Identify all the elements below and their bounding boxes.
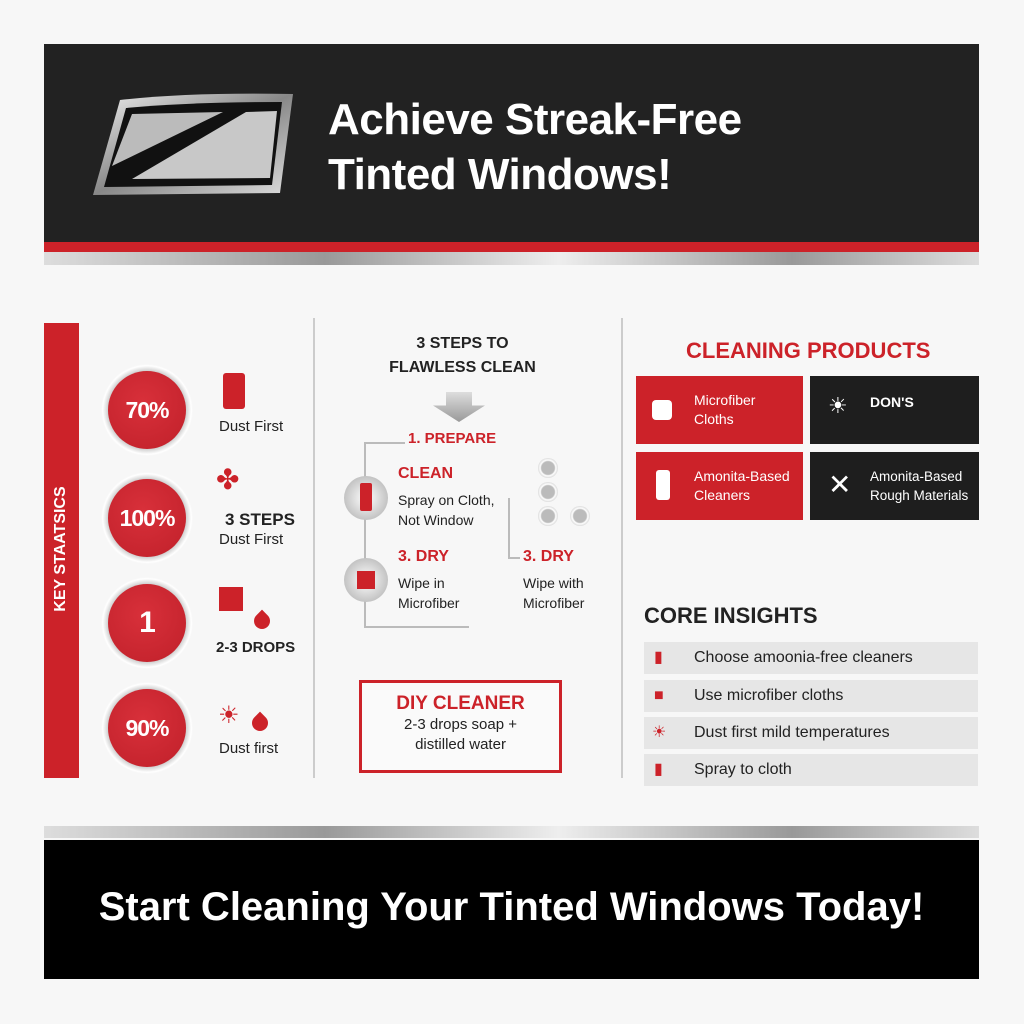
header banner — [44, 44, 979, 265]
panel: 3 steps: Not Window — [398, 512, 473, 528]
stat 1: 1 — [139, 606, 155, 639]
panel: cleaning products: DON'S — [870, 394, 914, 410]
panel: core insights: Spray to cloth — [694, 761, 792, 778]
panel: key statistics: Dust First — [219, 531, 283, 548]
panel: key statistics: 2-3 DROPS — [216, 639, 295, 656]
panel: cleaning products: Amonita-Based — [694, 468, 790, 484]
stat 70% — [101, 364, 193, 456]
panel: cleaning products: Amonita-Based — [870, 469, 962, 484]
panel: core insights: Use microfiber cloths — [694, 687, 843, 704]
panel: 3 steps: CLEAN — [398, 465, 453, 482]
panel: cleaning products — [636, 338, 979, 520]
panel: key statistics: ☀ — [218, 702, 240, 729]
panel: key statistics: KEY STAATSICS — [52, 486, 69, 612]
DIY cleaner box — [359, 680, 562, 773]
panel: 3 steps: Microfiber — [523, 595, 584, 611]
heading — [389, 335, 536, 376]
arrow down — [433, 392, 485, 422]
panel: cleaning products: CLEANING PRODUCTS — [686, 338, 930, 363]
panel: cleaning products: ☀ — [828, 393, 848, 418]
panel: 3 steps: 1. PREPARE — [408, 430, 496, 447]
panel: 3 steps — [344, 335, 590, 773]
panel: 3 steps: 3. DRY — [523, 548, 574, 565]
panel: 3 steps: 3. DRY — [398, 548, 449, 565]
title — [328, 95, 742, 199]
panel: cleaning products: Microfiber — [694, 392, 755, 408]
stat 90%: 90% — [125, 714, 169, 740]
panel: core insights: ▮ — [654, 649, 663, 666]
panel: cleaning products: Cloths — [694, 411, 734, 427]
DIY cleaner box: 2-3 drops soap + — [404, 716, 517, 733]
panel: cleaning products: Rough Materials — [870, 488, 968, 503]
panel: key statistics — [44, 318, 315, 778]
heading: 3 STEPS TO — [416, 335, 509, 352]
stat 100%: 100% — [120, 504, 174, 530]
step clean — [344, 476, 388, 520]
heading: FLAWLESS CLEAN — [389, 359, 536, 376]
panel: core insights: Choose amoonia-free cleaners — [694, 649, 913, 666]
DIY cleaner box: DIY CLEANER — [396, 693, 525, 714]
panel: key statistics: Dust first — [219, 740, 278, 757]
panel: key statistics: ✤ — [216, 464, 239, 495]
DIY cleaner box: distilled water — [415, 736, 506, 753]
title: Tinted Windows! — [328, 150, 671, 199]
title: Achieve Streak-Free — [328, 95, 742, 144]
panel: 3 steps: Microfiber — [398, 595, 459, 611]
panel: core insights — [644, 603, 978, 786]
panel: cleaning products: Cleaners — [694, 487, 750, 503]
stat 100% — [101, 472, 193, 564]
panel: core insights: Dust first mild temperatures — [694, 724, 890, 741]
sidebar label — [44, 323, 79, 778]
step dry — [344, 558, 388, 602]
panel: key statistics: Dust First — [219, 418, 283, 435]
panel: core insights: ▮ — [654, 761, 663, 778]
panel: key statistics: 3 STEPS — [225, 510, 295, 529]
footer banner — [44, 826, 979, 979]
icon: tinted window — [93, 94, 293, 195]
panel: core insights: ☀ — [652, 724, 666, 741]
stat 1 — [101, 577, 193, 669]
dots — [508, 498, 510, 558]
panel: core insights: CORE INSIGHTS — [644, 603, 818, 628]
panel: 3 steps: Spray on Cloth, — [398, 492, 494, 508]
panel: cleaning products: ✕ — [828, 469, 851, 500]
stat 70%: 70% — [125, 396, 169, 422]
panel: 3 steps: Wipe with — [523, 575, 584, 591]
panel: core insights: ■ — [654, 687, 664, 704]
panel: 3 steps: Wipe in — [398, 575, 445, 591]
stat 90% — [101, 682, 193, 774]
footer banner: Start Cleaning Your Tinted Windows Today! — [99, 885, 924, 929]
